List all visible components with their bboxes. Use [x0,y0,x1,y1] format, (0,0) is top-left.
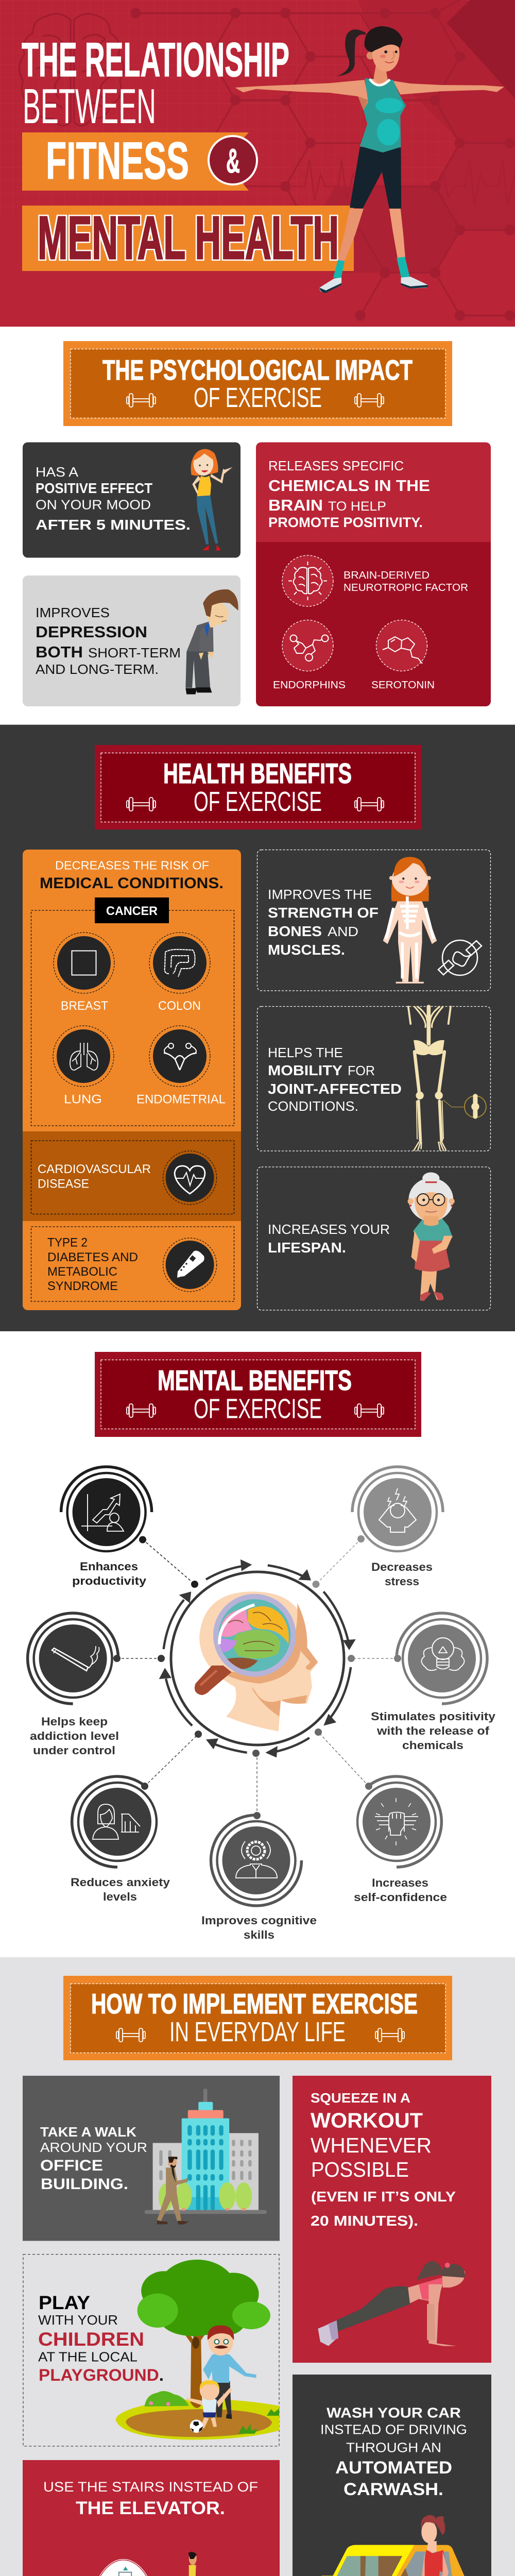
illustration: elevator and stairs [24,2552,280,2576]
callout: cardiovascular disease: DISEASE [38,1177,89,1191]
illustration: waving woman [191,449,233,551]
panel: walk around office: AROUND YOUR [40,2140,147,2155]
section: everyday life background [0,1957,515,2576]
icon: brain-derived neurotropic factor: NEUROTROPIC FACTOR [344,582,468,594]
panel: play with your children: PLAY [39,2292,90,2313]
illustration: woman washing yellow car [297,2515,484,2576]
panel: play with your children: PLAYGROUND . [39,2366,164,2384]
callout: cardiovascular disease [31,1141,234,1214]
panel: mobility for joint-affected conditions: FOR [348,1063,375,1078]
ribbon: Mental Health [22,204,354,272]
title: The Relationship Between: BETWEEN [23,79,156,134]
icon: lung cancer: LUNG [64,1092,102,1107]
panel: mobility for joint-affected conditions: HELPS THE [268,1045,343,1060]
panel: wash your car: THROUGH AN [346,2440,441,2455]
panel: wash your car: CARWASH. [344,2480,443,2499]
section: hero header [0,0,515,327]
heading: Health Benefits of Exercise [95,745,421,829]
panel: released brain chemicals [256,442,491,706]
diagram: brain ring with arrows [159,1560,356,1757]
benefit: enhances productivity [61,1467,198,1588]
panel: positive effect on mood: AFTER 5 MINUTES. [36,517,191,533]
icon: colon cancer [149,933,210,1013]
panel: wash your car: AUTOMATED [335,2458,452,2478]
benefit: enhances productivity: productivity [72,1574,147,1587]
panel: positive effect on mood: ON YOUR MOOD [36,497,151,512]
panel: squeeze in a workout: POSSIBLE [311,2158,409,2181]
benefit: self-confidence: Increases [372,1876,428,1889]
panel: play with your children [23,2255,279,2446]
callout: type 2 diabetes and metabolic syndrome: METABOLIC [47,1265,117,1279]
section: health benefits background [0,725,515,1331]
illustration: girl with skeleton [383,857,437,984]
icon: endorphins [273,620,346,691]
panel: use the stairs [23,2460,280,2576]
benefit: cognitive skills: Improves cognitive [201,1914,317,1927]
heading: Mental Benefits of Exercise: OF EXERCISE [194,1393,322,1424]
panel: strength of bones and muscles: AND [328,924,358,939]
benefit: addiction control [28,1613,165,1757]
illustration: sad man in suit [185,589,238,694]
panel: released brain chemicals: TO HELP [328,499,386,514]
panel: squeeze in a workout: WHENEVER [311,2133,432,2157]
icon: endorphins: ENDORPHINS [273,680,346,691]
benefit: stimulates positivity: Stimulates positivity [371,1710,496,1723]
panel: improves depression: IMPROVES [36,605,110,620]
panel: released brain chemicals: BRAIN [268,496,323,514]
section: psychological impact background [0,327,515,725]
section: mental benefits background [0,1331,515,1957]
callout: type 2 diabetes and metabolic syndrome: TYPE 2 [47,1236,88,1250]
panel: strength of bones and muscles: IMPROVES THE [268,887,372,902]
icon: brain-derived neurotropic factor [282,555,468,606]
label: cancer: CANCER [106,904,158,918]
heading: Health Benefits of Exercise: HEALTH BENEFITS [163,757,352,789]
panel: wash your car: WASH YOUR CAR [327,2405,461,2421]
benefit: addiction control: addiction level [30,1730,119,1742]
panel: mobility for joint-affected conditions: JOINT-AFFECTED [268,1081,402,1097]
panel: increases your lifespan [258,1167,490,1310]
benefit: addiction control: Helps keep [41,1715,108,1728]
panel: strength of bones and muscles: MUSCLES. [268,942,345,958]
illustration: elderly woman [408,1173,455,1301]
benefit: reduces anxiety [71,1731,202,1903]
panel: squeeze in a workout: SQUEEZE IN A [311,2090,410,2106]
panel: play with your children: AT THE LOCAL [38,2349,138,2365]
heading: Health Benefits of Exercise: OF EXERCISE [194,786,322,817]
benefit: stimulates positivity: with the release of [376,1724,490,1737]
panel: strength of bones and muscles [258,850,490,991]
panel: improves depression: AND LONG-TERM. [36,662,159,677]
panel: released brain chemicals: RELEASES SPECIFIC [268,458,404,473]
heading: Mental Benefits of Exercise: MENTAL BENEFITS [158,1364,352,1396]
benefit: stimulates positivity [348,1613,496,1752]
icon: serotonin: SEROTONIN [371,680,435,691]
ribbon: Fitness &: & [226,142,240,180]
panel: wash your car: INSTEAD OF DRIVING [320,2421,467,2437]
panel: mobility for joint-affected conditions: CONDITIONS. [268,1098,358,1114]
divider line between sections [0,724,515,725]
panel: play with your children: CHILDREN [38,2329,144,2350]
panel: squeeze in a workout: 20 MINUTES). [311,2213,418,2229]
icon: brain-derived neurotropic factor: BRAIN-DERIVED [344,570,430,581]
icon: endometrial cancer [136,1026,226,1107]
heading: The Psychological Impact of Exercise: OF EXERCISE [194,382,322,413]
illustration: woman doing plank [318,2261,465,2346]
panel: walk around office: TAKE A WALK [40,2124,136,2140]
illustration: leg skeleton [408,1007,486,1150]
callout: type 2 diabetes and metabolic syndrome [31,1227,234,1301]
benefit: addiction control: under control [33,1744,115,1757]
panel: squeeze in a workout [293,2076,491,2363]
icon: lung cancer [53,1026,114,1107]
benefit: self-confidence: self-confidence [354,1891,447,1904]
icon: serotonin [371,620,435,691]
title: The Relationship Between [22,32,289,134]
title: The Relationship Between: THE RELATIONSHIP [22,32,289,87]
panel: squeeze in a workout: WORKOUT [311,2108,423,2132]
panel: released brain chemicals: CHEMICALS IN THE [268,477,430,495]
icon: breast cancer: BREAST [61,999,108,1013]
panel: squeeze in a workout: (EVEN IF IT’S ONLY [311,2189,456,2205]
icon: breast cancer [54,933,114,1013]
icon: joint [438,940,482,975]
panel: positive effect on mood: HAS A [36,464,79,480]
panel: decreases risk of medical conditions: DECREASES THE RISK OF [55,858,209,872]
label: cancer [95,897,169,923]
panel: improves depression: SHORT-TERM [88,645,181,660]
panel: mobility for joint-affected conditions: MOBILITY [268,1062,342,1078]
panel: walk around office: OFFICE [40,2157,103,2174]
benefit: decreases stress: stress [385,1575,419,1588]
panel: mobility for joint-affected conditions [258,1007,490,1151]
panel: decreases risk of medical conditions [23,850,241,1310]
heading: How to Implement Exercise [63,1976,452,2060]
illustration: father and son under tree [116,2260,279,2439]
benefit: self-confidence [315,1728,447,1904]
benefit: cognitive skills [201,1750,317,1941]
callout: type 2 diabetes and metabolic syndrome: DIABETES AND [47,1250,138,1264]
panel: released brain chemicals: PROMOTE POSITIVITY. [268,515,423,530]
icon: endometrial cancer: ENDOMETRIAL [136,1092,226,1107]
panel: improves depression: BOTH [36,643,83,661]
panel: positive effect on mood [23,442,241,557]
panel: improves depression [23,575,241,706]
panel: strength of bones and muscles: STRENGTH OF [268,905,379,921]
panel: walk around office: BUILDING. [41,2176,128,2193]
connector lines [117,1539,398,1816]
callout: type 2 diabetes and metabolic syndrome: SYNDROME [47,1279,118,1293]
benefit: stimulates positivity: chemicals [402,1739,464,1752]
panel: wash your car [293,2375,491,2576]
benefit: decreases stress: Decreases [371,1561,433,1573]
panel: increases your lifespan: LIFESPAN. [268,1240,346,1256]
panel: increases your lifespan: INCREASES YOUR [268,1222,390,1237]
heading: How to Implement Exercise: IN EVERYDAY LIFE [169,2016,346,2047]
icon: colon cancer: COLON [158,999,201,1013]
benefit: decreases stress [312,1467,443,1588]
panel: use the stairs: THE ELEVATOR. [76,2498,225,2518]
panel: walk around office [23,2076,280,2241]
illustration: head with magnifier on brain [195,1591,318,1731]
panel: improves depression: DEPRESSION [36,623,147,641]
callout: cardiovascular disease: CARDIOVASCULAR [38,1162,151,1176]
panel: decreases risk of medical conditions: MEDICAL CONDITIONS. [40,875,224,892]
panel: strength of bones and muscles: BONES [268,923,322,939]
panel: positive effect on mood: POSITIVE EFFECT [36,480,152,496]
benefit: reduces anxiety: Reduces anxiety [71,1876,170,1889]
benefit: reduces anxiety: levels [103,1890,137,1903]
illustration: woman stretching arms [235,26,504,293]
heading: Mental Benefits of Exercise [95,1352,421,1437]
benefit: enhances productivity: Enhances [80,1560,138,1573]
panel: use the stairs: USE THE STAIRS INSTEAD OF [43,2479,258,2495]
benefit: cognitive skills: skills [244,1928,274,1941]
panel: play with your children: WITH YOUR [38,2312,118,2328]
illustration: office building and walking man [145,2089,267,2225]
ribbon: Fitness &: FITNESS [46,131,189,190]
heading: The Psychological Impact of Exercise [63,341,452,426]
